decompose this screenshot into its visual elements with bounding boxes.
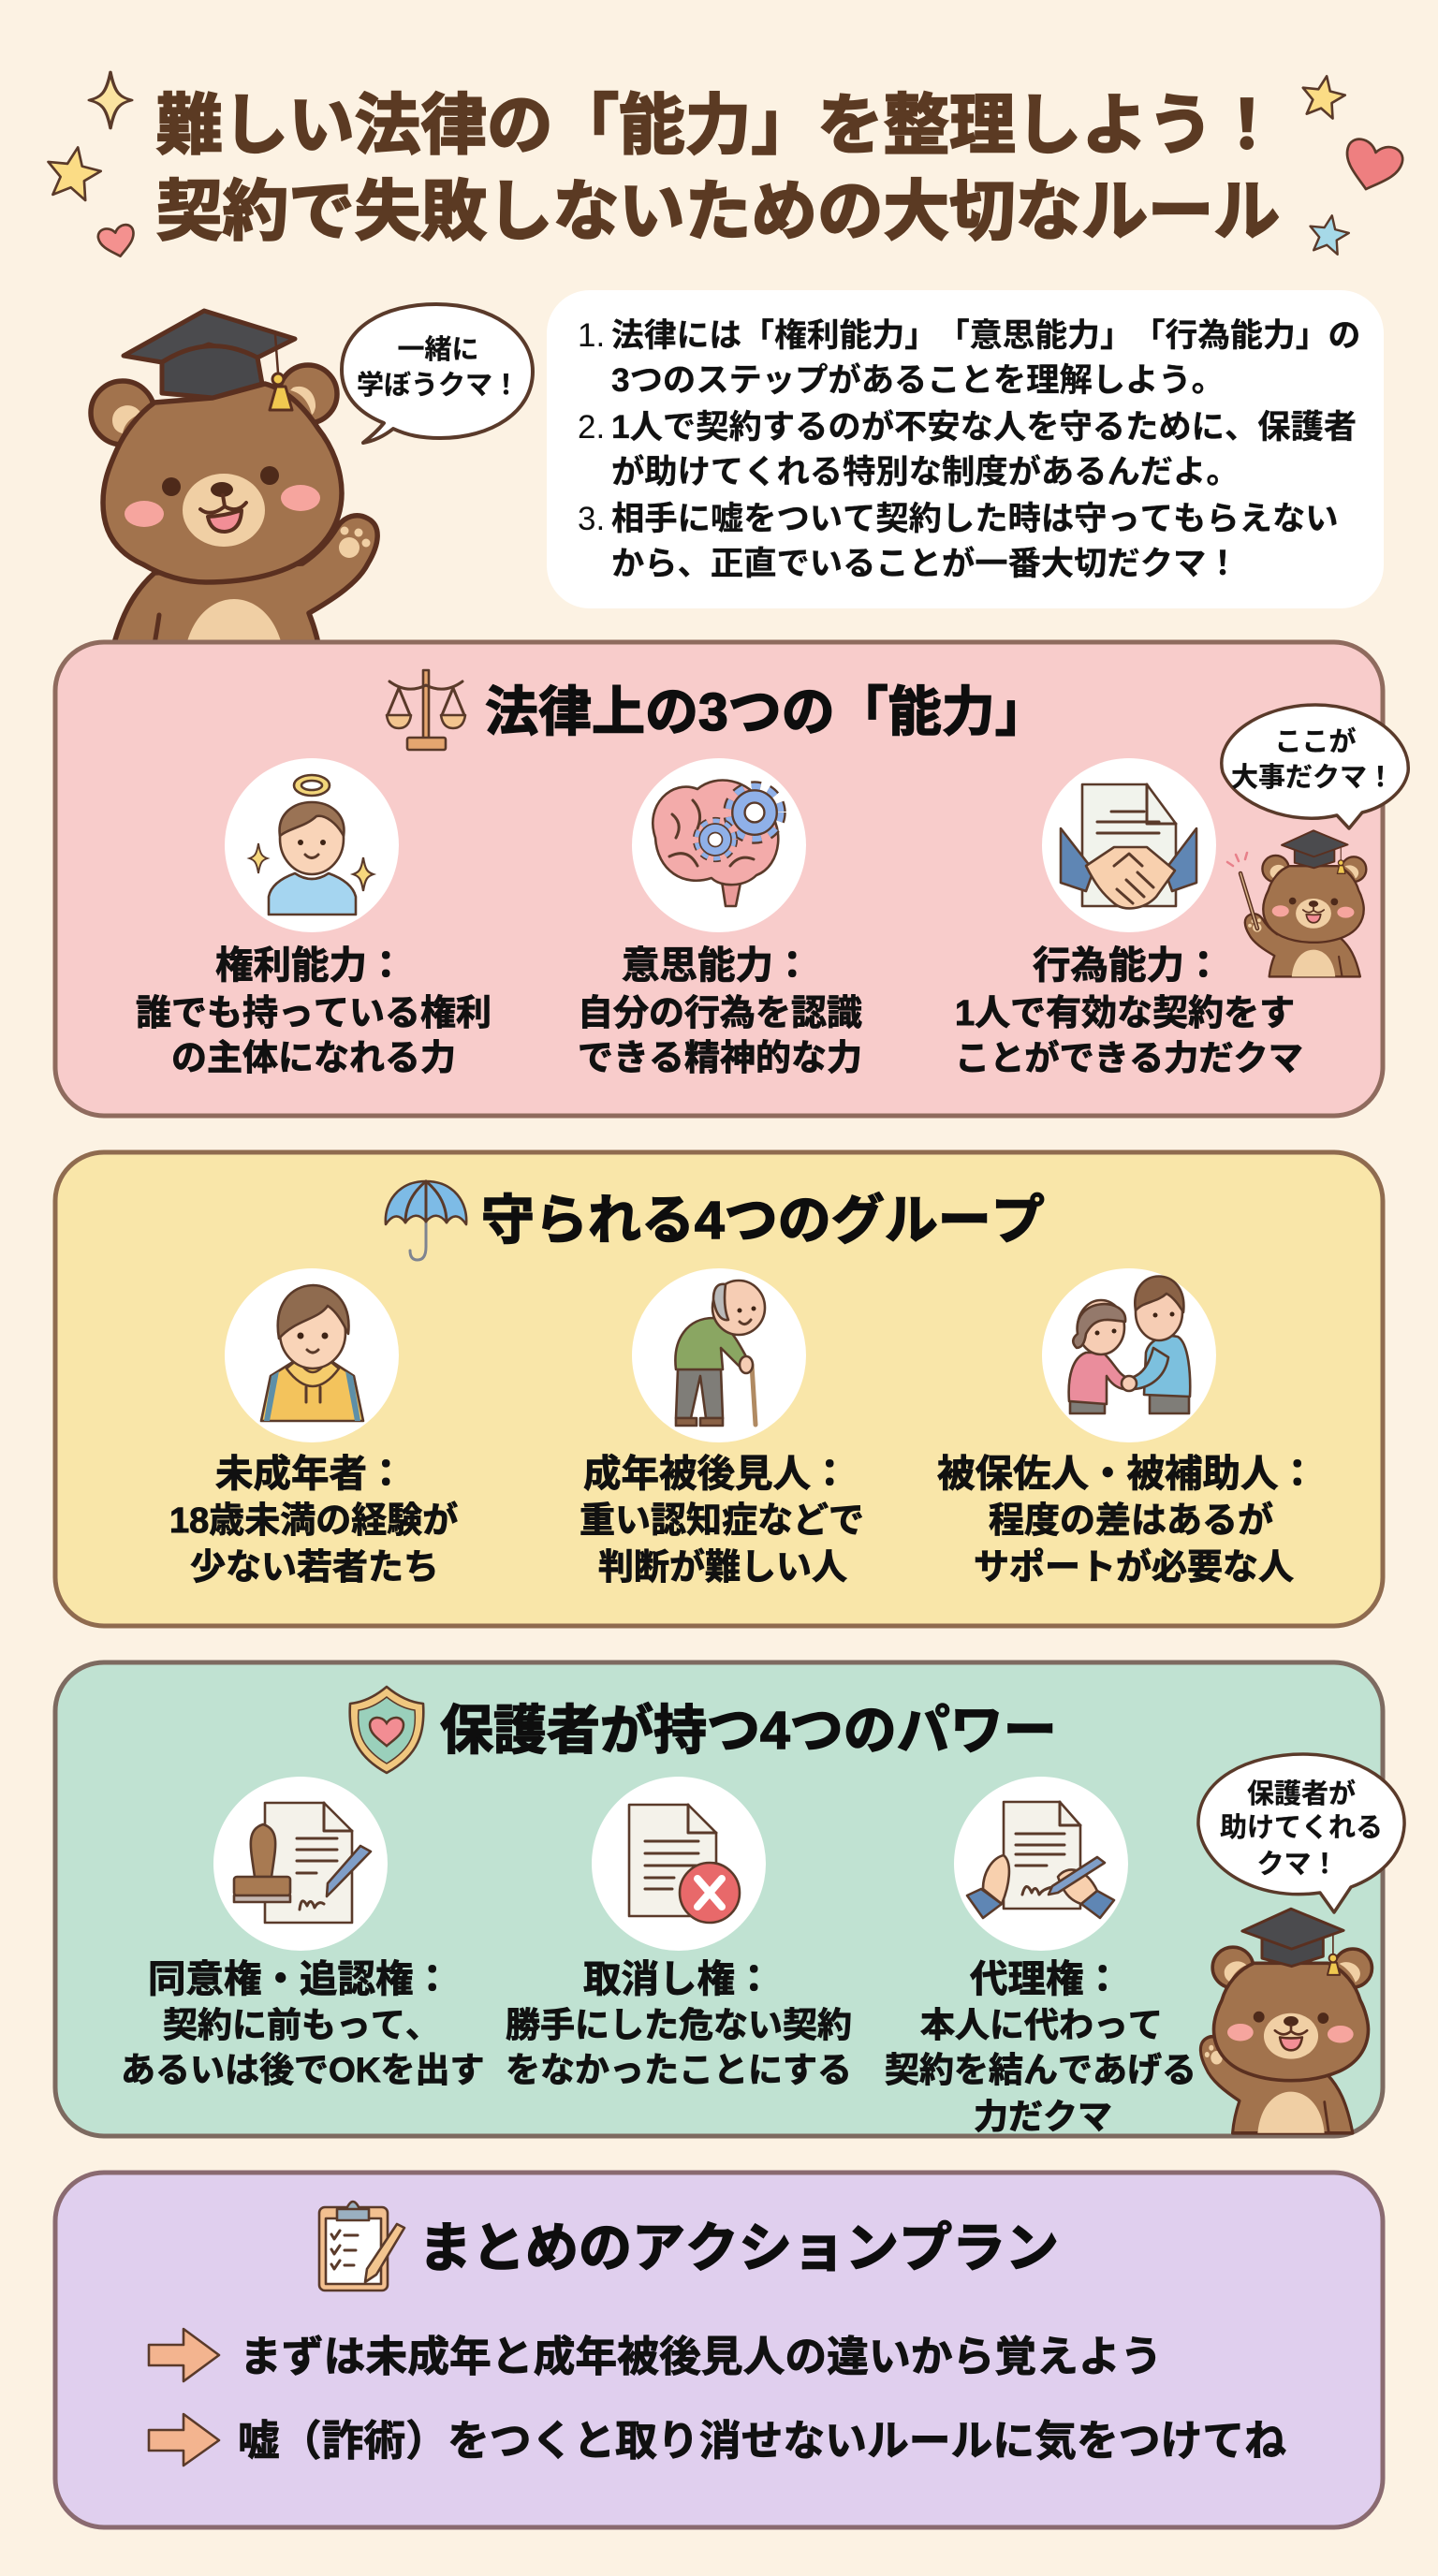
item: consent and ratification rights: 同意権・追認権： [148, 1957, 451, 2000]
heading: まとめのアクションプラン [418, 2218, 1059, 2278]
item: legal capacity to act: 行為能力： [1033, 944, 1223, 987]
item: capacity for rights: 権利能力： [215, 944, 404, 987]
action item 2: 嘘（詐術）をつくと取り消せないルールに気をつけてね [238, 2418, 1286, 2465]
item: right to cancel: 勝手にした危ない契約 [506, 2006, 852, 2044]
speech bubble: guardians help [1198, 1754, 1404, 1912]
item: mental capacity: 意思能力： [622, 944, 811, 987]
item: right to cancel [506, 1777, 852, 2089]
panel: action plan [55, 2173, 1383, 2527]
item: right to cancel: をなかったことにする [506, 2051, 852, 2089]
intro: numbered key points: 2. [578, 409, 605, 446]
mascot bear: waving with graduation cap [91, 311, 377, 662]
item: capacity for rights: の主体になれる力 [171, 1039, 456, 1078]
speech bubble: guardians help: 助けてくれる [1220, 1812, 1383, 1843]
speech bubble: guardians help: 保護者が [1247, 1778, 1356, 1809]
intro: numbered key points [547, 290, 1384, 608]
speech bubble: guardians help: クマ！ [1256, 1850, 1339, 1880]
item: mental capacity: できる精神的な力 [578, 1039, 862, 1078]
speech bubble: learn together [342, 304, 533, 443]
item: right to cancel: 取消し権： [583, 1957, 773, 2000]
heading: 保護者が持つ4つのパワー [440, 1701, 1057, 1761]
item: consent and ratification rights: あるいは後でOKを出す [121, 2051, 485, 2089]
speech bubble: this is important: 大事だクマ！ [1231, 762, 1394, 793]
item: consent and ratification rights: 契約に前もって、 [163, 2006, 440, 2044]
item: legal capacity to act: ことができる力だクマ [955, 1038, 1303, 1077]
title: 契約で失敗しないための大切なルール [156, 174, 1280, 248]
mascot bear: waving left [1200, 1909, 1372, 2133]
item: legal capacity to act: 1人で有効な契約をす [955, 994, 1295, 1033]
icon: umbrella [386, 1181, 466, 1260]
intro: numbered key points: 3つのステップがあることを理解しよう。 [611, 362, 1225, 399]
intro: numbered key points: から、正直でいることが一番大切だクマ！ [611, 546, 1240, 582]
heading: 守られる4つのグループ [481, 1191, 1045, 1251]
item: adult wards [580, 1268, 864, 1588]
decorations: stars and hearts [43, 72, 1405, 260]
panel: three legal capacities [55, 642, 1408, 1116]
item: minors: 少ない若者たち [190, 1548, 439, 1588]
item: mental capacity: 自分の行為を認識 [578, 994, 862, 1033]
icon: scales [387, 670, 465, 750]
item: right of agency: 力だクマ [974, 2098, 1112, 2136]
item: right of agency: 契約を結んであげる [885, 2051, 1196, 2089]
intro: numbered key points: 相手に嘘をついて契約した時は守ってもらえない [611, 501, 1339, 537]
title [156, 88, 1280, 248]
speech bubble: learn together: 学ぼうクマ！ [357, 370, 520, 401]
panel: four protected groups [55, 1152, 1383, 1626]
item: adult wards: 成年被後見人： [583, 1452, 848, 1495]
intro: numbered key points: が助けてくれる特別な制度があるんだよ。 [611, 454, 1240, 490]
item: consent and ratification rights [121, 1777, 485, 2089]
intro: numbered key points: 3. [578, 501, 605, 537]
item: minors: 18歳未満の経験が [169, 1501, 458, 1541]
action item 1: まずは未成年と成年被後見人の違いから覚えよう [240, 2334, 1163, 2380]
intro: numbered key points: 1人で契約するのが不安な人を守るために、保護者 [611, 409, 1357, 446]
speech bubble: this is important [1222, 705, 1408, 828]
item: mental capacity [578, 758, 862, 1078]
speech bubble: learn together: 一緒に [397, 334, 479, 365]
heading: 法律上の3つの「能力」 [485, 682, 1049, 742]
intro: numbered key points: 1. [578, 317, 605, 354]
item: adult wards: 重い認知症などで [580, 1501, 864, 1541]
intro: numbered key points: 法律には「権利能力」「意思能力」「行為能力」の [611, 317, 1360, 354]
item: right of agency [885, 1777, 1196, 2136]
speech bubble: this is important: ここが [1274, 725, 1357, 757]
mascot bear: pointing teacher [1227, 830, 1366, 976]
item: people under curatorship and assistance: サポートが必要な人 [974, 1548, 1294, 1588]
icon: clipboard [319, 2202, 404, 2291]
item: adult wards: 判断が難しい人 [598, 1548, 847, 1588]
icon: shield [350, 1687, 423, 1773]
item: people under curatorship and assistance: 程度の差はあるが [989, 1501, 1273, 1541]
item: capacity for rights [136, 758, 492, 1078]
item: people under curatorship and assistance [937, 1268, 1316, 1588]
item: legal capacity to act [955, 758, 1303, 1077]
item: capacity for rights: 誰でも持っている権利 [136, 994, 492, 1033]
panel: four guardian powers [55, 1662, 1404, 2136]
item: minors: 未成年者： [215, 1452, 404, 1495]
item: right of agency: 代理権： [970, 1957, 1122, 2000]
item: right of agency: 本人に代わって [920, 2006, 1163, 2044]
item: minors [169, 1268, 458, 1588]
title: 難しい法律の「能力」を整理しよう！ [156, 88, 1280, 162]
item: people under curatorship and assistance: 被保佐人・被補助人： [937, 1452, 1316, 1495]
